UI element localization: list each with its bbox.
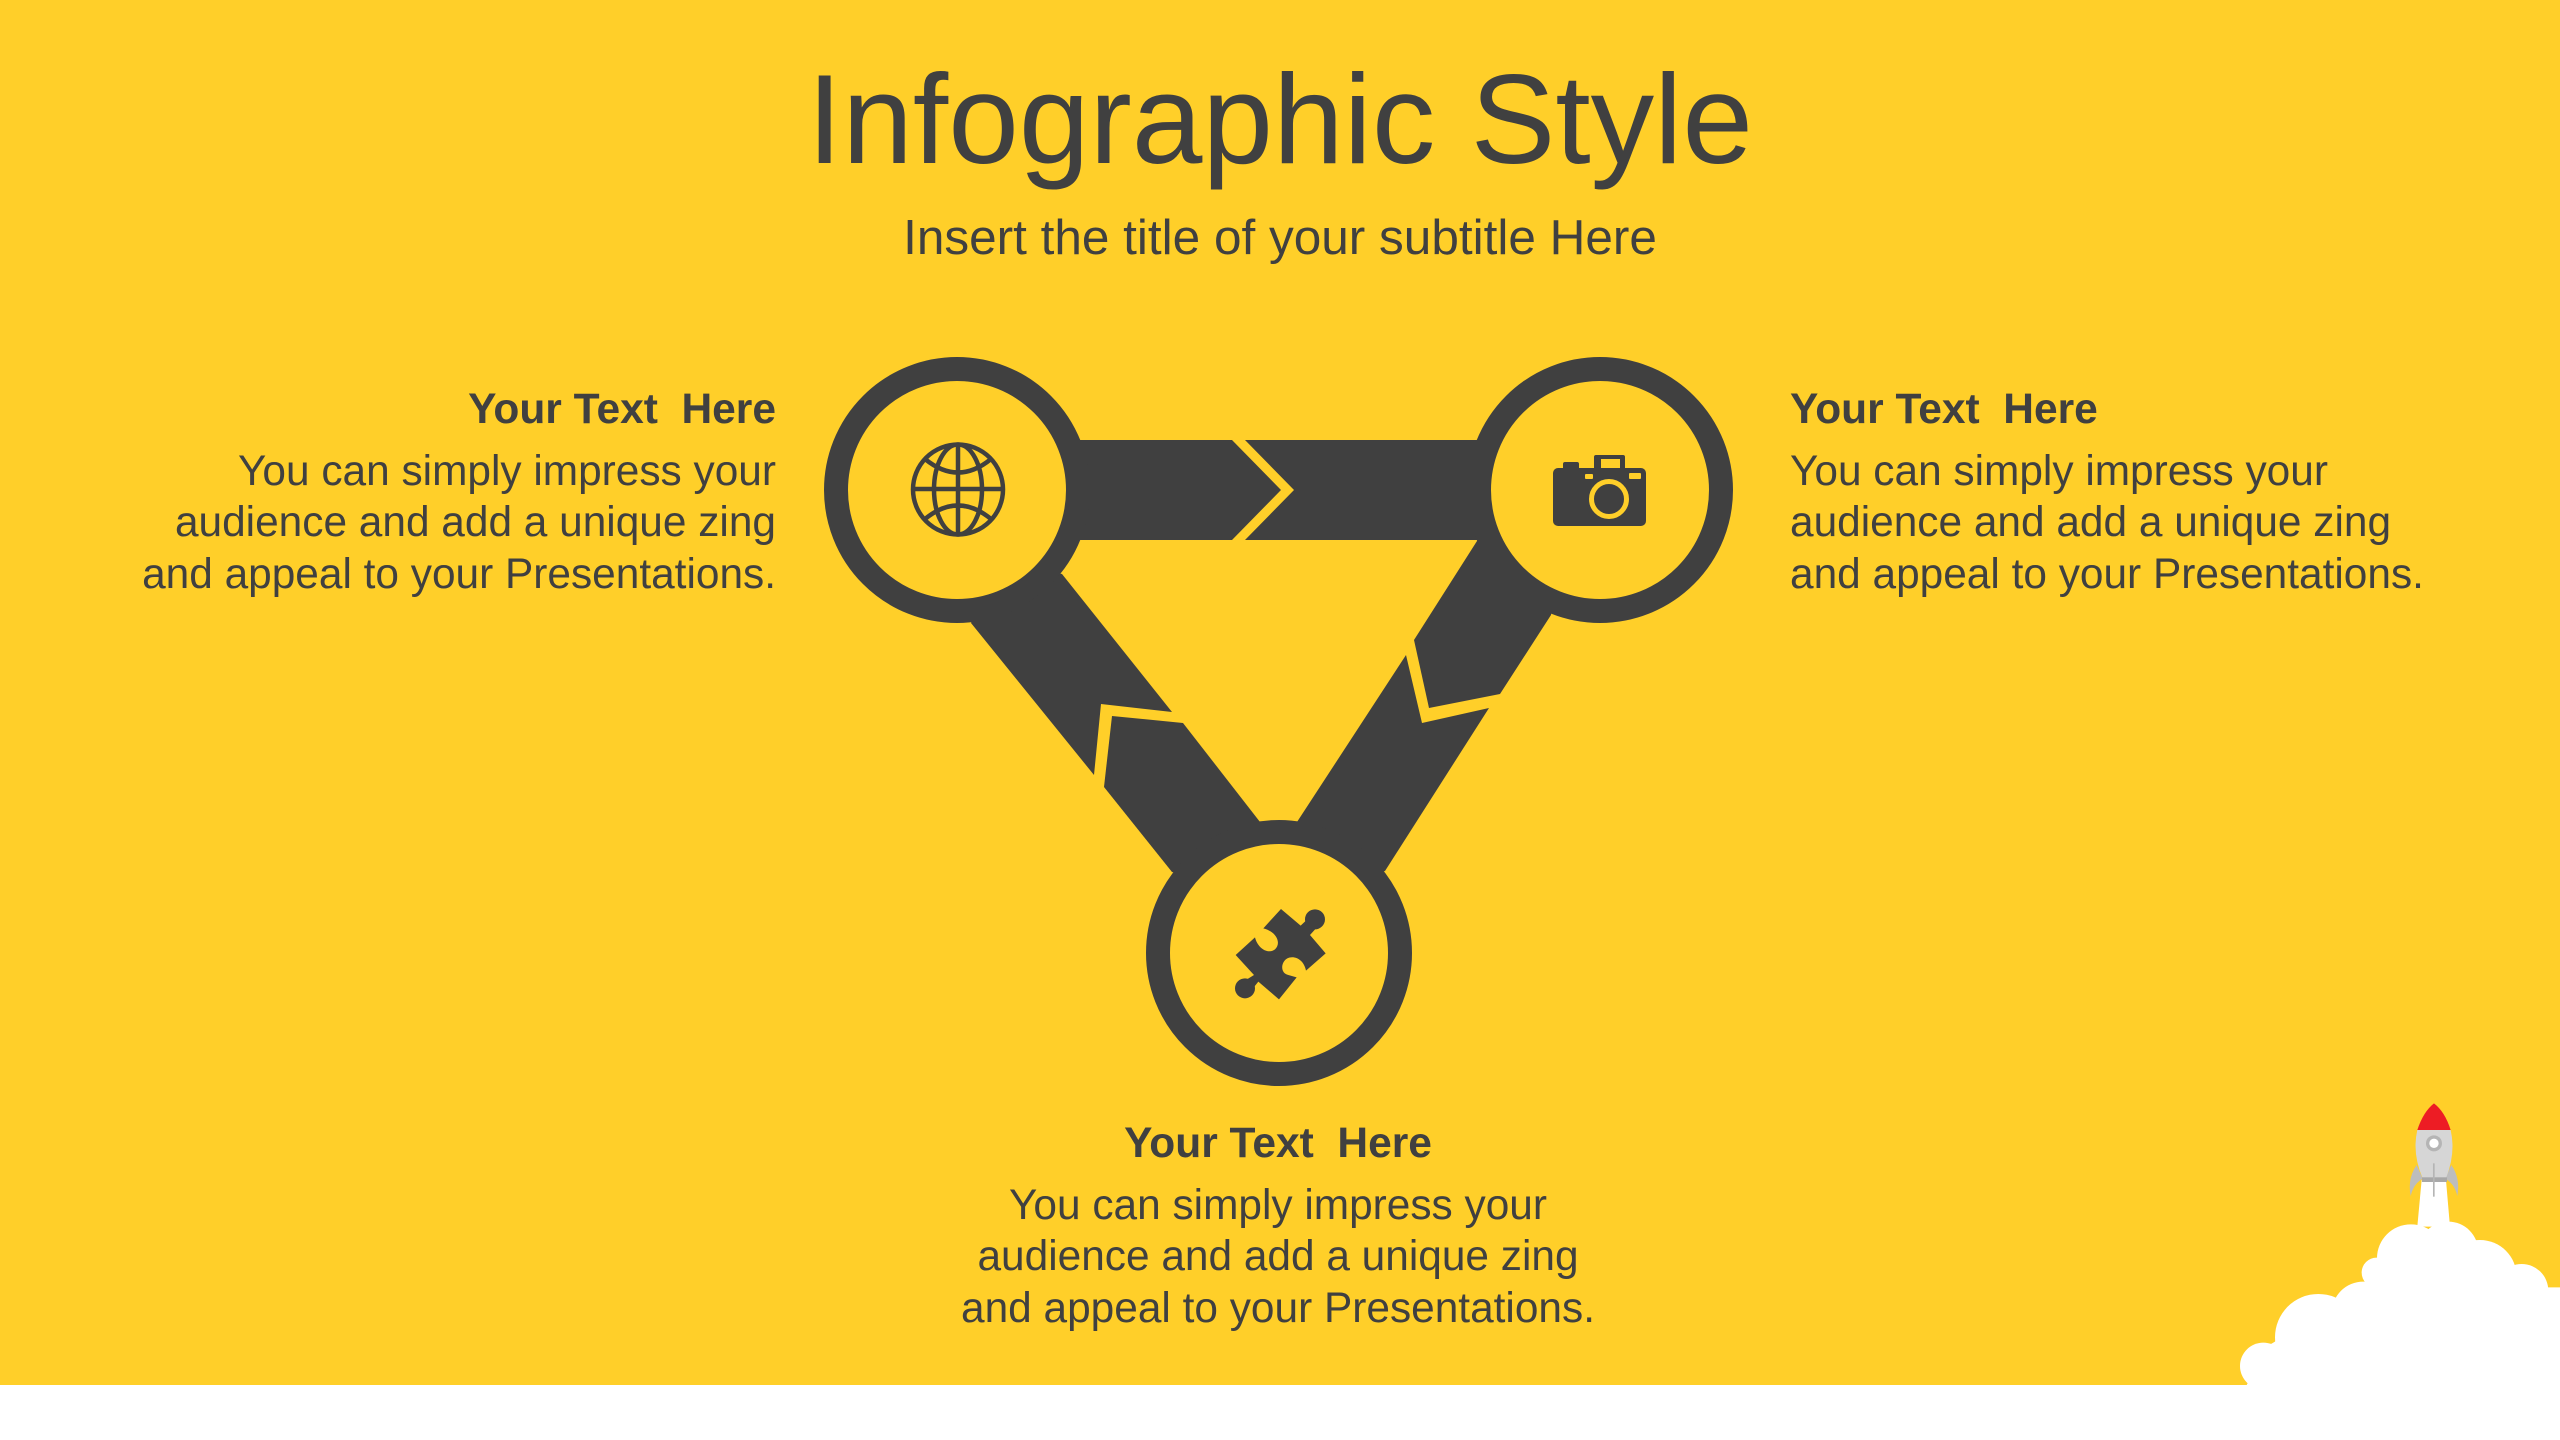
arrow band: top, right segment [1245, 440, 1520, 540]
node: camera [1479, 369, 1721, 611]
text block: right [1790, 386, 2424, 597]
rocket launch illustration [2240, 1103, 2560, 1389]
text block: left: audience and add a unique zing [175, 498, 776, 545]
text block: left [142, 386, 776, 597]
icon: globe [913, 444, 1003, 534]
icon: puzzle piece [1235, 909, 1326, 999]
node: globe [836, 369, 1078, 611]
exhaust [2417, 1180, 2450, 1227]
subtitle: Insert the title of your subtitle Here [903, 210, 1657, 265]
text block: bottom: audience and add a unique zing [977, 1232, 1579, 1279]
text block: right: and appeal to your Presentations. [1790, 550, 2424, 597]
text block: bottom [961, 1120, 1595, 1331]
rocket [2410, 1103, 2458, 1197]
text block: bottom: You can simply impress your [1009, 1181, 1547, 1228]
title: Infographic Style [807, 48, 1753, 190]
text block: left: You can simply impress your [238, 447, 776, 494]
arrow band: right, lower segment [1290, 655, 1489, 900]
text block: bottom: and appeal to your Presentations. [961, 1284, 1595, 1331]
arrow band: right, upper segment [1414, 541, 1560, 708]
text block: right: Your Text Here [1790, 386, 2098, 433]
node: puzzle [1158, 832, 1400, 1074]
icon: camera [1553, 455, 1646, 526]
arrow band: left, upper segment [971, 560, 1172, 775]
text block: left: Your Text Here [468, 386, 776, 433]
text block: right: audience and add a unique zing [1790, 498, 2391, 545]
arrow band: top, left segment [1040, 440, 1281, 540]
text block: right: You can simply impress your [1790, 447, 2328, 494]
text block: left: and appeal to your Presentations. [142, 550, 776, 597]
arrow band: left, lower segment [1104, 716, 1280, 900]
triangle diagram [836, 369, 1721, 1074]
cloud [2240, 1222, 2560, 1389]
text block: bottom: Your Text Here [1124, 1120, 1432, 1167]
